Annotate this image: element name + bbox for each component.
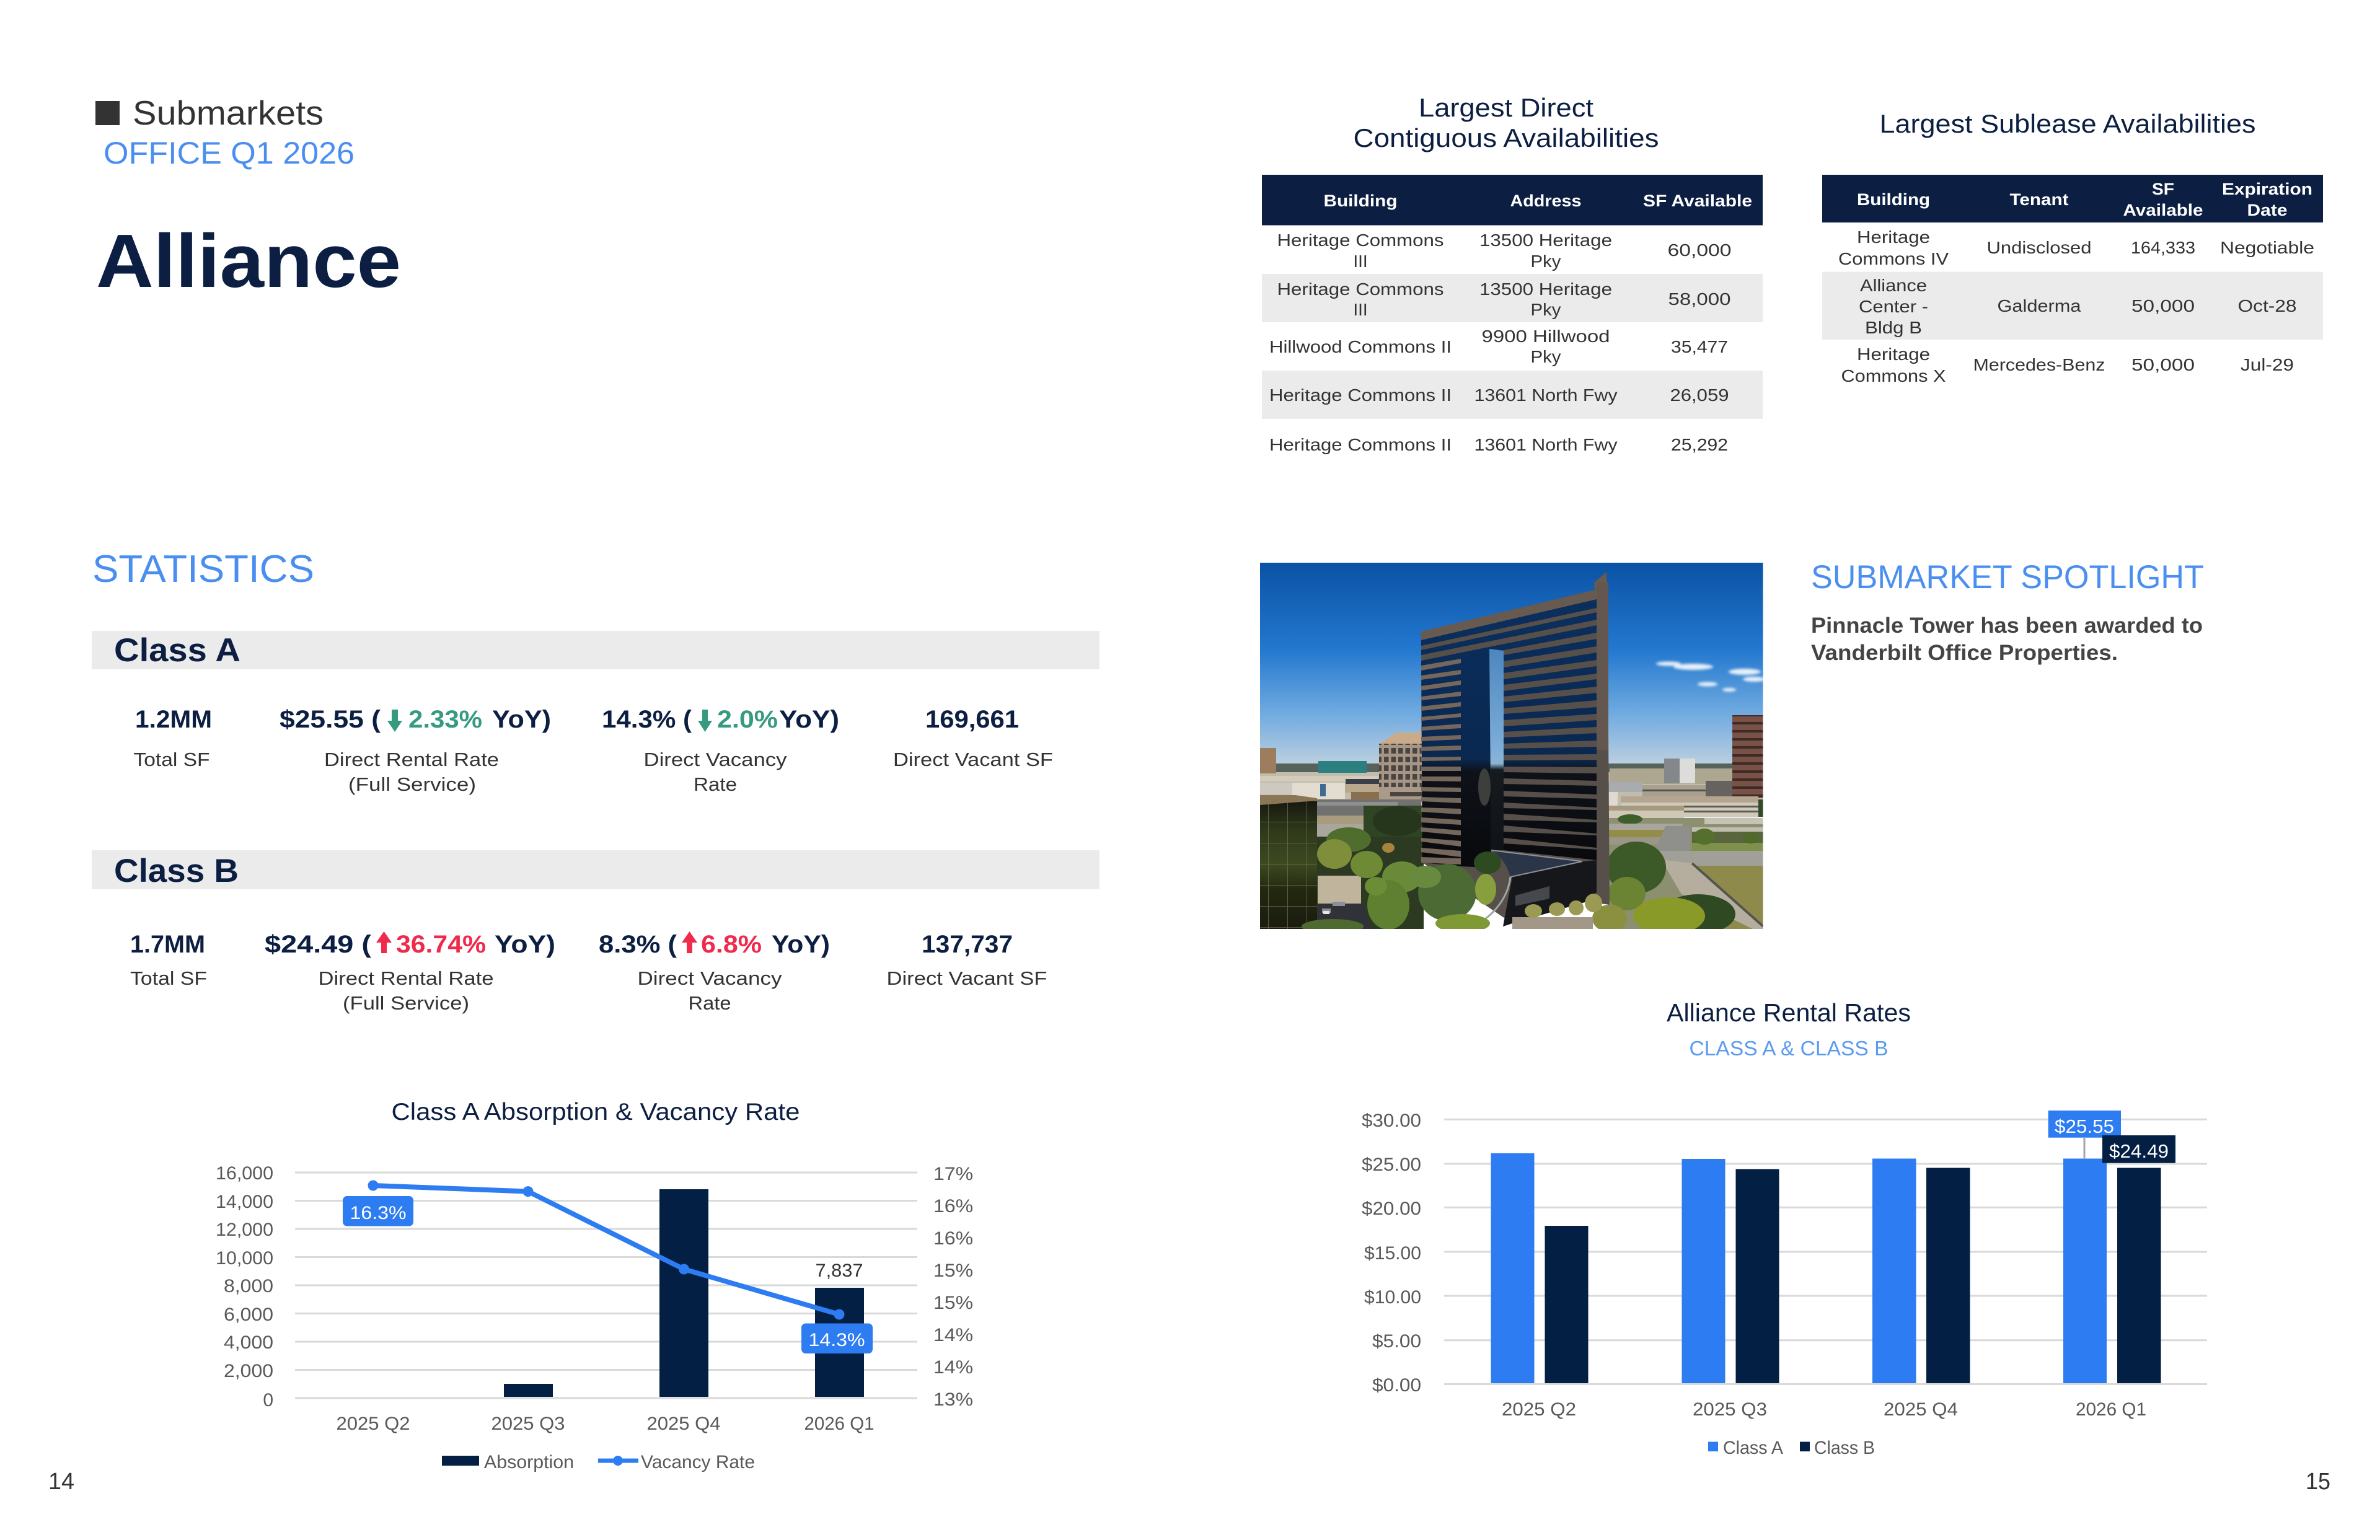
table row 1: Heritage [1857, 227, 1930, 247]
table header: Address [1510, 191, 1582, 210]
stat: direct rental rate [280, 706, 551, 795]
stat: direct rental rate: YoY) [495, 931, 555, 958]
table row 1: Undisclosed [1987, 238, 2091, 257]
callout: 16.3%: 16.3% [350, 1203, 407, 1223]
table row 1: Pky [1531, 252, 1561, 271]
panel: largest sublease availabilities [1822, 109, 2323, 385]
stat: direct vacancy rate [602, 706, 839, 795]
table row 3 [1269, 327, 1728, 366]
spotlight text [1811, 614, 2203, 665]
stat: direct rental rate: 36.74% [396, 931, 486, 958]
right axis labels: 15% [933, 1261, 973, 1281]
title: Alliance [96, 219, 401, 303]
table row 5 [1269, 435, 1728, 454]
table row 2: 13500 Heritage [1479, 279, 1612, 299]
callout: 14.3%: 14.3% [808, 1330, 865, 1350]
stat: total SF: 1.2MM [135, 706, 212, 733]
stat: direct rental rate: $25.55 ( [280, 706, 381, 733]
right axis labels [933, 1164, 973, 1410]
stat: direct vacancy rate: YoY) [772, 931, 830, 958]
stat: direct rental rate: YoY) [492, 706, 551, 733]
bar value label: 7,837 [816, 1261, 863, 1281]
table row 4 [1262, 371, 1763, 419]
x axis labels: 2025 Q4 [647, 1414, 720, 1434]
callout: 16.3% [343, 1196, 413, 1226]
table row 3: 35,477 [1671, 337, 1728, 356]
panel: class B statistics [92, 850, 1100, 1014]
chart title: Alliance Rental Rates [1667, 998, 1911, 1027]
stat: direct vacancy rate [599, 931, 830, 1014]
stat: direct vacancy rate: 8.3% ( [599, 931, 677, 958]
table header: SF [2152, 180, 2174, 198]
callout: class B value [2102, 1135, 2175, 1163]
table header: SF Available [1643, 191, 1752, 210]
period label: OFFICE Q1 2026 [104, 136, 355, 170]
y axis labels: $20.00 [1362, 1199, 1421, 1219]
stat: direct vacancy rate: Direct Vacancy [637, 967, 782, 989]
x axis labels: 2026 Q1 [804, 1414, 874, 1434]
left axis labels: 6,000 [224, 1305, 273, 1325]
table row 2: Pky [1531, 300, 1561, 319]
y axis labels: $10.00 [1364, 1287, 1421, 1308]
right axis labels: 16% [933, 1196, 973, 1217]
table row 2: III [1353, 300, 1368, 319]
stat: total SF [130, 931, 207, 989]
table header: Building [1324, 191, 1397, 210]
table row 3: 50,000 [2131, 355, 2195, 374]
stat: direct vacant SF: Direct Vacant SF [886, 967, 1047, 989]
stat: direct rental rate: Direct Rental Rate [324, 749, 499, 770]
page number right: 15 [2306, 1469, 2330, 1495]
class A bars [1491, 1153, 2107, 1383]
chart: Alliance rental rates [1362, 998, 2207, 1458]
chart subtitle: CLASS A & CLASS B [1690, 1037, 1888, 1060]
stat: direct vacant SF [886, 931, 1047, 989]
stat: direct vacancy rate: 6.8% [701, 931, 762, 958]
class B heading: Class B [114, 853, 239, 889]
stat: direct vacant SF: Direct Vacant SF [893, 749, 1053, 770]
left axis labels [216, 1163, 273, 1410]
photo: office tower [1260, 563, 1763, 929]
table heading: Contiguous Availabilities [1354, 123, 1659, 152]
stat: direct vacancy rate: Rate [688, 992, 731, 1014]
class A heading: Class A [114, 632, 240, 669]
stat: total SF [134, 706, 212, 770]
table row 5: 25,292 [1671, 435, 1728, 454]
table heading: Largest Direct [1419, 93, 1593, 122]
left axis labels: 10,000 [216, 1248, 273, 1269]
stat: direct vacant SF [893, 706, 1053, 770]
vacancy rate line [368, 1180, 844, 1320]
right axis labels: 14% [933, 1325, 973, 1345]
table header [1822, 175, 2323, 222]
table row 1: 13500 Heritage [1479, 231, 1612, 250]
stat: direct rental rate: $24.49 ( [265, 931, 372, 958]
spotlight text: Pinnacle Tower has been awarded to [1811, 614, 2203, 638]
table row 4: 26,059 [1670, 385, 1729, 405]
table row 5: 13601 North Fwy [1474, 435, 1618, 454]
table row 5: Heritage Commons II [1269, 435, 1452, 454]
right axis labels: 16% [933, 1228, 973, 1249]
left axis labels: 16,000 [216, 1163, 273, 1184]
table row 2: Center - [1859, 297, 1928, 316]
icon: square marker [95, 101, 120, 125]
stat: direct vacancy rate: Rate [694, 773, 737, 795]
spotlight heading: SUBMARKET SPOTLIGHT [1811, 559, 2204, 596]
table header: Date [2247, 201, 2287, 219]
panel: class A statistics [92, 631, 1100, 795]
table row 1: 164,333 [2131, 238, 2195, 257]
table row 1: III [1353, 252, 1368, 271]
table row 1 [1277, 231, 1732, 271]
callout: class B value: $24.49 [2109, 1140, 2169, 1162]
x axis labels [1502, 1399, 2146, 1420]
page number left: 14 [48, 1469, 74, 1495]
table row 1: 60,000 [1667, 240, 1732, 260]
table row 3: Hillwood Commons II [1269, 337, 1452, 356]
panel: largest direct contiguous availabilities [1262, 93, 1763, 454]
table row 2 [1822, 272, 2323, 340]
table row 3: Mercedes-Benz [1973, 355, 2105, 374]
table heading: Largest Sublease Availabilities [1879, 109, 2256, 138]
stat: total SF: Total SF [134, 749, 209, 770]
y axis labels [1362, 1111, 1421, 1396]
table row 2: 50,000 [2131, 296, 2195, 315]
table row 2: 58,000 [1668, 289, 1730, 309]
stat: direct vacancy rate: Direct Vacancy [643, 749, 787, 770]
x axis labels: 2025 Q3 [1693, 1399, 1767, 1420]
left axis labels: 8,000 [224, 1276, 273, 1296]
right axis labels: 14% [933, 1357, 973, 1378]
x axis labels: 2026 Q1 [2076, 1399, 2146, 1420]
table row 1: Heritage Commons [1277, 231, 1444, 250]
absorption bars [504, 1189, 864, 1397]
left axis labels: 14,000 [216, 1192, 273, 1212]
y axis labels: $30.00 [1362, 1111, 1421, 1131]
table row 2: Galderma [1997, 296, 2081, 315]
stat: direct vacancy rate: 2.0% [717, 706, 778, 733]
x axis labels: 2025 Q3 [491, 1414, 565, 1434]
class B band [92, 850, 1100, 889]
stat: direct vacancy rate: 14.3% ( [602, 706, 692, 733]
table row 2: Alliance [1860, 276, 1927, 295]
legend [1708, 1438, 1875, 1458]
callout: class A value: $25.55 [2055, 1115, 2114, 1137]
right axis labels: 17% [933, 1164, 973, 1184]
statistics heading: STATISTICS [92, 548, 314, 591]
table header [1262, 175, 1763, 226]
table header: Expiration [2222, 180, 2312, 198]
table row 1: Negotiable [2220, 238, 2314, 257]
x axis labels: 2025 Q4 [1884, 1399, 1958, 1420]
left axis labels: 0 [263, 1390, 273, 1410]
y axis labels: $25.00 [1362, 1155, 1421, 1175]
table row 2 [1262, 274, 1763, 322]
callout: class A value [2048, 1111, 2121, 1138]
chart title: Class A Absorption & Vacancy Rate [392, 1099, 800, 1125]
stat: direct rental rate: (Full Service) [348, 773, 476, 795]
y axis labels: $0.00 [1372, 1375, 1421, 1396]
right axis labels: 15% [933, 1293, 973, 1313]
y axis labels: $5.00 [1372, 1331, 1421, 1352]
legend: Class B [1814, 1438, 1875, 1458]
class A band [92, 631, 1100, 669]
legend: Absorption [484, 1452, 574, 1472]
x axis labels: 2025 Q2 [1502, 1399, 1576, 1420]
section header [95, 94, 355, 170]
table row 3: Pky [1531, 347, 1561, 366]
table header: Tenant [2009, 190, 2069, 209]
table heading [1354, 93, 1659, 152]
table row 2: Heritage Commons [1277, 279, 1444, 299]
left axis labels: 12,000 [216, 1220, 273, 1240]
x axis labels: 2025 Q2 [336, 1414, 410, 1434]
table row 3: Jul-29 [2241, 355, 2294, 374]
stat: direct rental rate: (Full Service) [343, 992, 469, 1014]
callout: 14.3% [801, 1324, 873, 1353]
table row 3: Commons X [1841, 366, 1946, 385]
stat: direct rental rate [265, 931, 555, 1014]
table row 1: Commons IV [1838, 249, 1949, 268]
table row 3: 9900 Hillwood [1481, 327, 1610, 346]
class B bars [1545, 1168, 2161, 1383]
stat: direct vacancy rate: YoY) [779, 706, 839, 733]
chart: Class A absorption and vacancy rate [216, 1099, 973, 1472]
table row 2: Oct-28 [2237, 296, 2297, 315]
table row 3 [1841, 345, 2294, 385]
spotlight text: Vanderbilt Office Properties. [1811, 641, 2118, 665]
stat: direct rental rate: 2.33% [408, 706, 482, 733]
y axis labels: $15.00 [1364, 1243, 1421, 1264]
stat: total SF: Total SF [130, 967, 207, 989]
stat: direct vacant SF: 169,661 [925, 706, 1019, 733]
left axis labels: 4,000 [224, 1332, 273, 1353]
stat: direct vacant SF: 137,737 [922, 931, 1013, 958]
table header: Available [2123, 201, 2203, 219]
x axis labels [336, 1414, 874, 1434]
table row 2: Bldg B [1865, 318, 1922, 337]
legend [442, 1452, 755, 1472]
table row 4: Heritage Commons II [1269, 385, 1452, 405]
table header: Building [1857, 190, 1930, 209]
legend: Vacancy Rate [641, 1452, 755, 1472]
section label: Submarkets [133, 94, 324, 132]
table row 1 [1838, 227, 2314, 268]
table row 3: Heritage [1857, 345, 1930, 364]
left axis labels: 2,000 [224, 1361, 273, 1381]
table row 4: 13601 North Fwy [1474, 385, 1618, 405]
stat: direct rental rate: Direct Rental Rate [319, 967, 493, 989]
leader line [2084, 1138, 2085, 1159]
legend: Class A [1723, 1438, 1783, 1458]
stat: total SF: 1.7MM [130, 931, 205, 958]
right axis labels: 13% [933, 1389, 973, 1410]
